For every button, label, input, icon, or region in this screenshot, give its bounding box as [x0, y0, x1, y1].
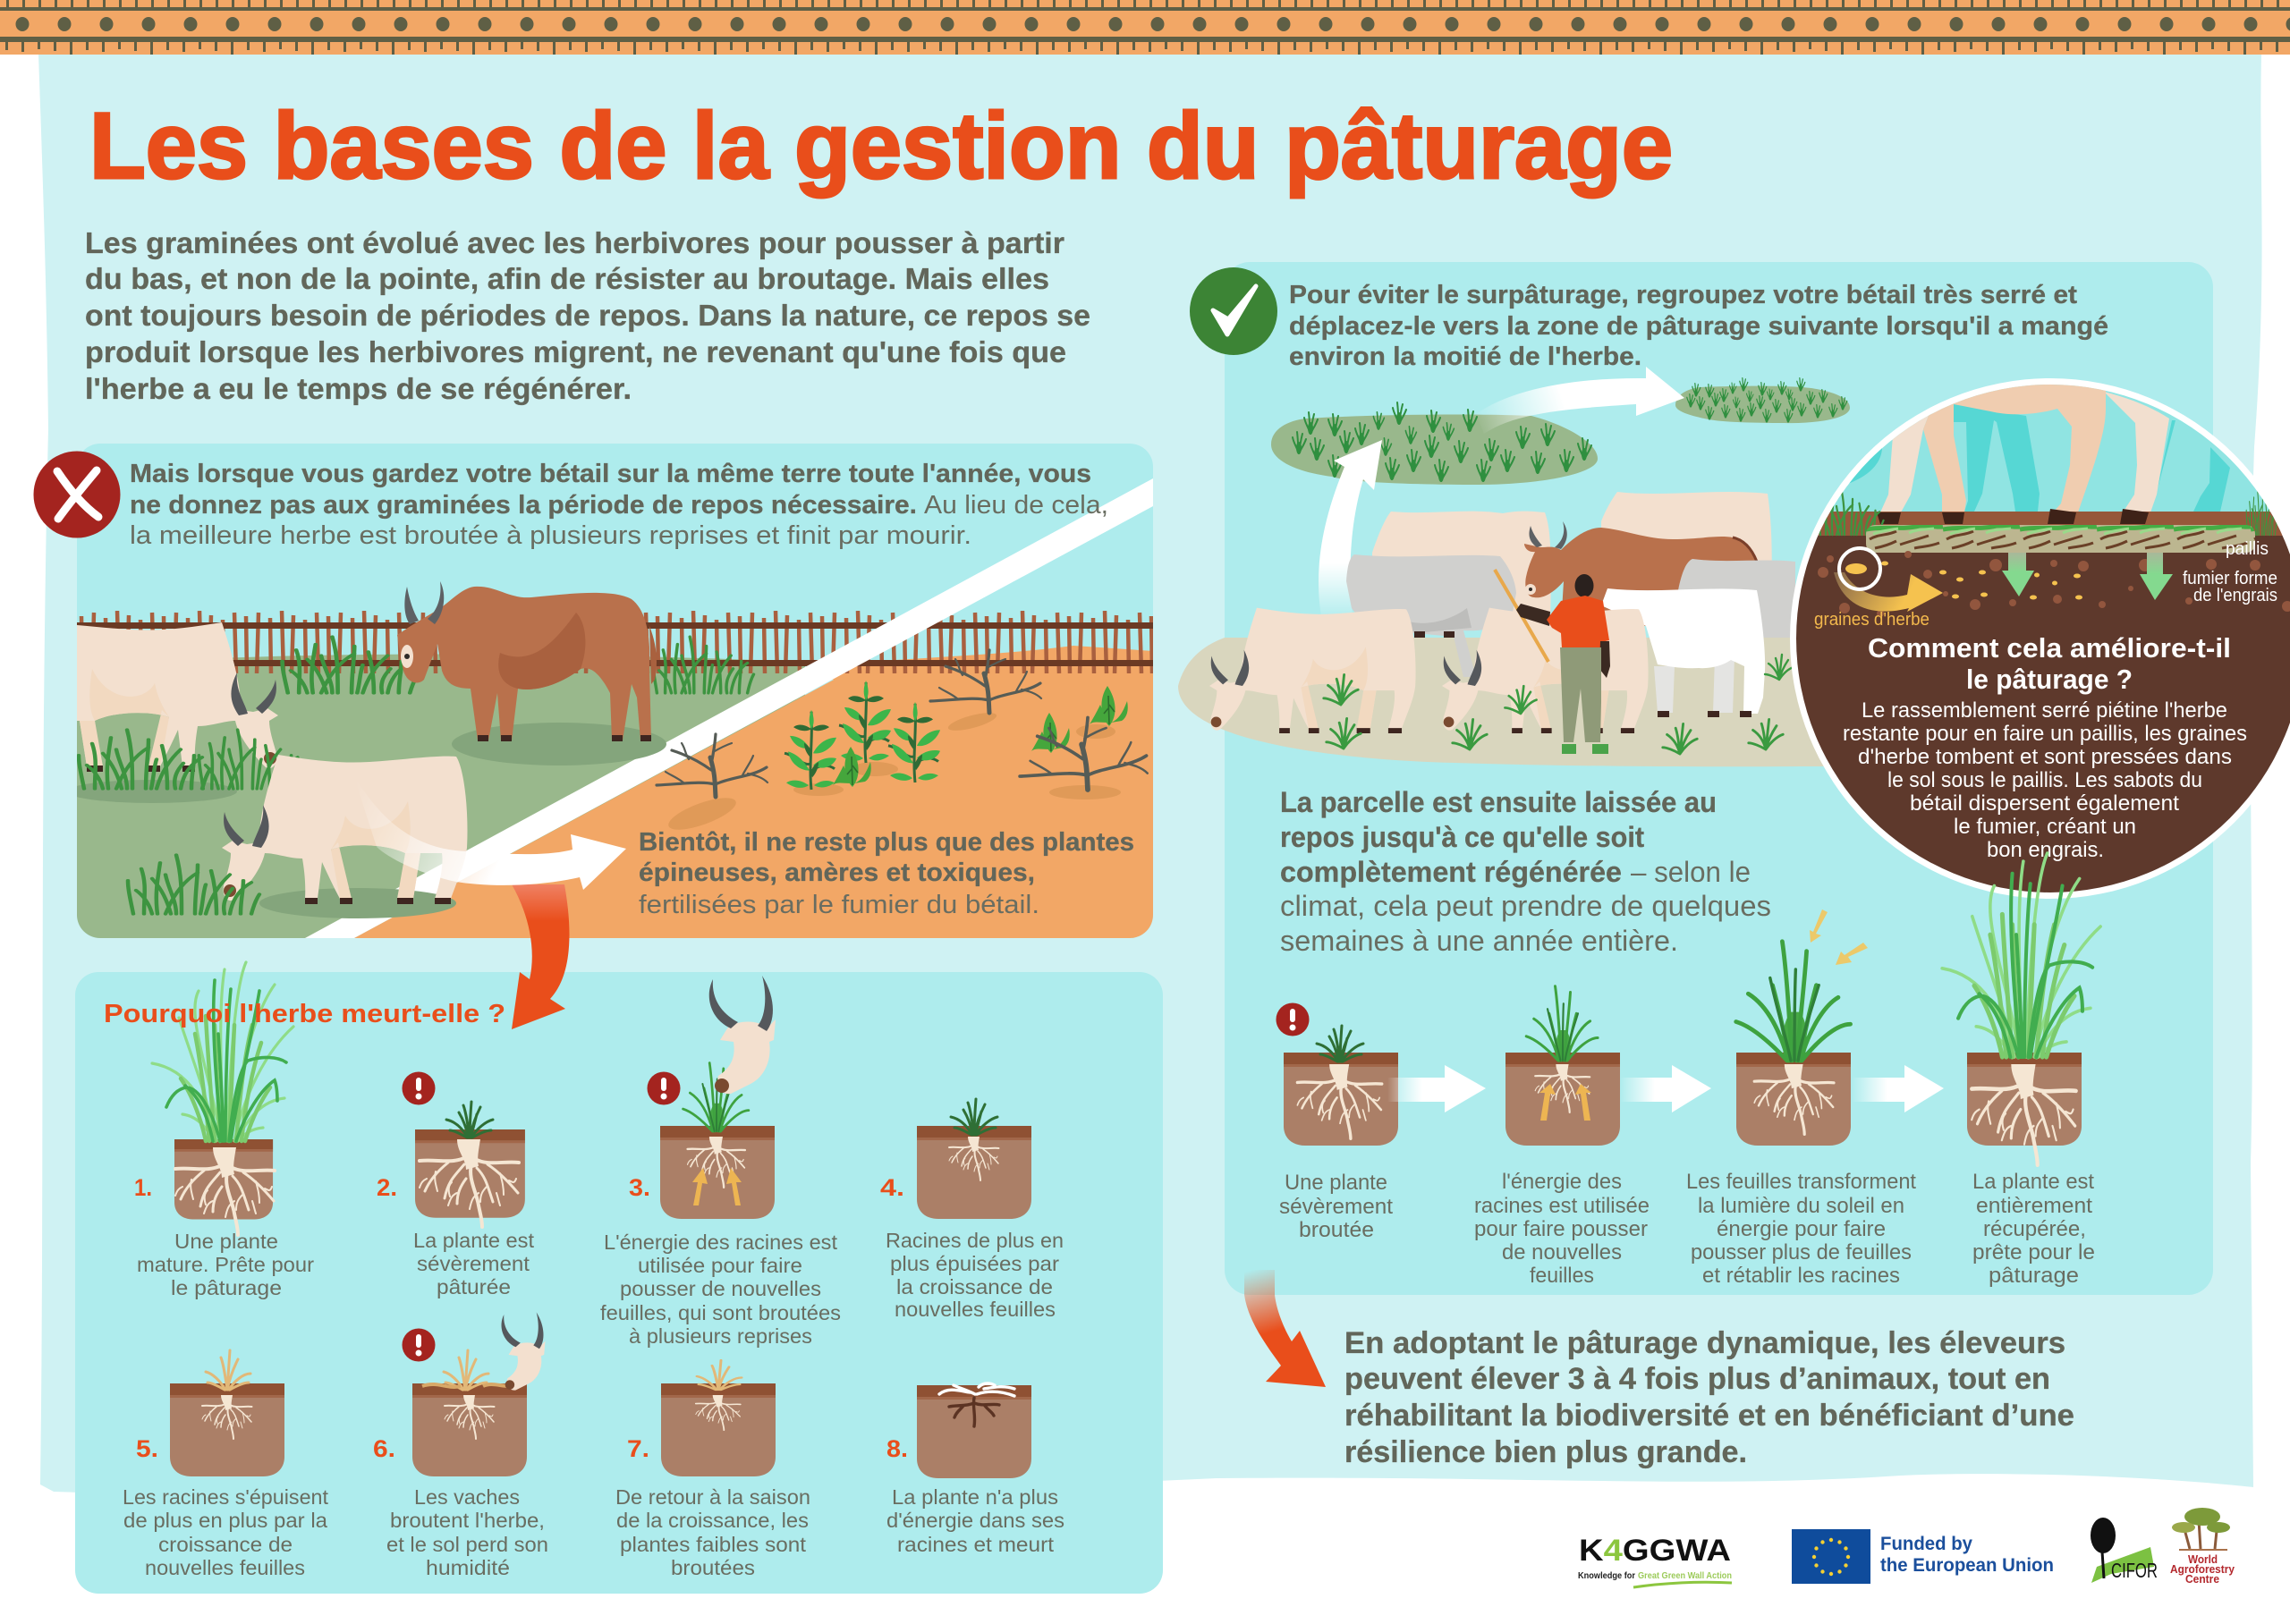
recovery step 3: et rétablir les racines — [1702, 1264, 1900, 1288]
step 6: cows graze, soil dries: broutent l'herbe, — [390, 1509, 545, 1532]
inset illustration: hooves, mulch and soil — [1789, 376, 2290, 911]
step 3: energy used, regrazed: utilisée pour faire — [638, 1254, 802, 1277]
conclusion text — [1344, 1326, 2074, 1469]
recovery step 3: la lumière du soleil en — [1698, 1194, 1904, 1218]
inset body text — [1843, 698, 2247, 862]
logo: CIFOR — [2091, 1518, 2158, 1583]
inset heading: le pâturage ? — [1966, 664, 2133, 695]
arrow: step 3 to 4 — [1852, 1065, 1944, 1112]
step 5: roots more exhausted: croissance de — [158, 1533, 293, 1556]
recovery step 3: énergie pour faire — [1717, 1217, 1886, 1241]
recovery step 1 — [1276, 1003, 1398, 1242]
recovery step 2: de nouvelles — [1502, 1240, 1622, 1265]
step 8: plant dies: 8. — [886, 1435, 908, 1462]
herd on trampled ground — [1178, 492, 1879, 766]
next pasture plots — [1271, 378, 1850, 485]
consequence text: fertilisées par le fumier du bétail. — [639, 891, 1039, 919]
step 5: roots more exhausted: 5. — [136, 1435, 158, 1462]
panel: overgrazing scene — [32, 444, 1153, 938]
step 7: weak plants grazed: broutées — [671, 1556, 755, 1579]
step 6: cows graze, soil dries: Les vaches — [414, 1485, 520, 1509]
step 1: mature plant: mature. Prête pour — [137, 1253, 314, 1276]
recovery step 2: pour faire pousser — [1474, 1217, 1648, 1241]
inset heading: Comment cela améliore-t-il — [1868, 632, 2231, 664]
arrow: move up to next plot — [1319, 440, 1382, 622]
step 7: weak plants grazed: 7. — [627, 1435, 649, 1462]
inset labels: graines d'herbe — [1814, 610, 1930, 630]
inset labels: fumier forme — [2183, 569, 2277, 588]
overgrazing text: ne donnez pas aux graminées la période de repos nécessaire. — [130, 491, 917, 520]
overgrazing text: Mais lorsque vous gardez votre bétail sur la même terre toute l'année, vous — [130, 460, 1091, 488]
herder figure — [1495, 570, 1610, 754]
overgrazing text: la meilleure herbe est broutée à plusieurs reprises et finit par mourir. — [130, 521, 971, 550]
step 5: roots more exhausted: Les racines s'épuisent — [123, 1485, 329, 1509]
inset body text: le sol sous le paillis. Les sabots du — [1887, 768, 2202, 792]
intro text block: l'herbe a eu le temps de se régénérer. — [85, 372, 632, 405]
step 4: roots exhausted: la croissance de — [896, 1275, 1053, 1298]
consequence text: Bientôt, il ne reste plus que des plantes — [639, 828, 1134, 857]
step 7: weak plants grazed: De retour à la saison — [615, 1485, 810, 1509]
inset body text: bon engrais. — [1987, 838, 2104, 862]
conclusion text: résilience bien plus grande. — [1344, 1435, 1747, 1469]
recovery step 4 — [1967, 1053, 2095, 1288]
logo: European Union — [1792, 1529, 2054, 1584]
logo: World Agroforestry Centre: Agroforestry — [2170, 1562, 2235, 1576]
consequence text — [639, 828, 1134, 919]
logo: K4GGWA — [1578, 1534, 1732, 1587]
logo: CIFOR: CIFOR — [2111, 1559, 2158, 1582]
intro text block: Les graminées ont évolué avec les herbivores pour pousser à partir — [85, 226, 1064, 259]
step 3: energy used, regrazed: pousser de nouvelles — [620, 1277, 821, 1300]
icon: red cross — [34, 451, 120, 538]
overgrazing text — [130, 460, 1108, 550]
arrow: orange arrow to conclusion — [1244, 1270, 1326, 1387]
intro text block: ont toujours besoin de périodes de repos. Dans la nature, ce repos se — [85, 299, 1090, 332]
step 3: energy used, regrazed: 3. — [629, 1174, 650, 1201]
step 5: roots more exhausted — [123, 1350, 329, 1579]
recovery step 4: entièrement — [1976, 1194, 2092, 1218]
logo: World Agroforestry Centre: World — [2188, 1552, 2218, 1566]
title: Les bases de la gestion du pâturage — [89, 94, 1673, 199]
instruction text: déplacez-le vers la zone de pâturage suivante lorsqu'il a mangé — [1289, 312, 2108, 341]
step 6: cows graze, soil dries: et le sol perd son — [386, 1533, 548, 1556]
rest period text: – selon le — [1631, 856, 1751, 888]
recovery step 3: Les feuilles transforment — [1686, 1170, 1916, 1194]
recovery step 3: pousser plus de feuilles — [1691, 1240, 1912, 1265]
step 2: severely grazed: La plante est — [413, 1229, 535, 1252]
logo: European Union: Funded by — [1880, 1534, 1972, 1554]
step 6: cows graze, soil dries: 6. — [373, 1435, 395, 1462]
step 2: severely grazed: pâturée — [437, 1275, 511, 1298]
instruction text: environ la moitié de l'herbe. — [1289, 343, 1641, 371]
step 8: plant dies — [886, 1383, 1064, 1556]
recovery step 4: pâturage — [1989, 1264, 2079, 1288]
decorative top border band — [0, 0, 2290, 55]
instruction text — [1289, 281, 2108, 371]
step 8: plant dies: La plante n'a plus — [892, 1485, 1058, 1509]
logo: European Union: the European Union — [1880, 1555, 2054, 1576]
instruction text: Pour éviter le surpâturage, regroupez votre bétail très serré et — [1289, 281, 2077, 309]
recovery step 1: broutée — [1299, 1218, 1374, 1242]
step 4: roots exhausted — [880, 1099, 1064, 1321]
logo: World Agroforestry Centre: Centre — [2185, 1572, 2219, 1586]
step 3: energy used, regrazed: feuilles, qui sont broutées — [600, 1301, 841, 1324]
step 5: roots more exhausted: de plus en plus par la — [123, 1509, 327, 1532]
inset body text: bétail dispersent également — [1910, 791, 2179, 816]
recovery step 2: feuilles — [1530, 1264, 1594, 1288]
step 1: mature plant: Une plante — [174, 1230, 278, 1253]
recovery step 3 — [1686, 909, 1916, 1288]
step 2: severely grazed — [377, 1071, 535, 1298]
step 6: cows graze, soil dries — [373, 1312, 548, 1579]
recovered tall grass over the inset — [1942, 853, 2100, 1057]
intro text block — [85, 226, 1090, 405]
rest period text: La parcelle est ensuite laissée au — [1280, 786, 1717, 818]
step 1: mature plant: 1. — [134, 1174, 152, 1201]
rest period text: climat, cela peut prendre de quelques — [1280, 890, 1771, 922]
step 4: roots exhausted: Racines de plus en — [886, 1229, 1064, 1252]
intro text block: du bas, et non de la pointe, afin de résister au broutage. Mais elles — [85, 262, 1049, 295]
arrow: white curved arrow — [353, 774, 626, 890]
rest period text — [1280, 786, 1771, 957]
recovery step 4: récupérée, — [1983, 1217, 2086, 1241]
step 3: energy used, regrazed: L'énergie des racines est — [604, 1231, 838, 1254]
recovery step 4: prête pour le — [1972, 1240, 2095, 1265]
step 2: severely grazed: 2. — [377, 1174, 397, 1201]
conclusion text: peuvent élever 3 à 4 fois plus d’animaux, tout en — [1344, 1362, 2050, 1396]
logo: K4GGWA: K4GGWA — [1579, 1534, 1731, 1568]
inset circle: how it improves pasture — [1789, 376, 2290, 911]
inset labels: de l'engrais — [2193, 586, 2277, 605]
overgrazing text: Au lieu de cela, — [924, 491, 1108, 520]
step 7: weak plants grazed — [615, 1360, 810, 1579]
arrow: orange curved arrow to why panel — [512, 884, 569, 1029]
step 1: mature plant — [134, 962, 314, 1299]
step 5: roots more exhausted: nouvelles feuilles — [145, 1556, 305, 1579]
step 1: mature plant: le pâturage — [171, 1276, 282, 1299]
inset body text: restante pour en faire un paillis, les graines — [1843, 722, 2247, 746]
consequence text: épineuses, amères et toxiques, — [639, 859, 1035, 887]
scene: pasture, fence and cattle — [32, 478, 1153, 938]
logo: K4GGWA: Great Green Wall Action — [1638, 1571, 1732, 1581]
recovery step 2 — [1474, 986, 1650, 1288]
step 4: roots exhausted: nouvelles feuilles — [895, 1298, 1056, 1321]
step 7: weak plants grazed: plantes faibles sont — [620, 1533, 807, 1556]
step 4: roots exhausted: plus épuisées par — [890, 1252, 1059, 1275]
recovery step 2: l'énergie des — [1502, 1170, 1622, 1194]
rest period text: repos jusqu'à ce qu'elle soit — [1280, 821, 1644, 853]
icon: green check — [1190, 267, 1277, 355]
recovery step 2: racines est utilisée — [1474, 1194, 1650, 1218]
arrow: step 1 to 2 — [1387, 1065, 1486, 1112]
inset body text: le fumier, créant un — [1954, 815, 2136, 839]
lower panel: why the grass dies — [75, 962, 1163, 1594]
arrow: step 2 to 3 — [1620, 1065, 1711, 1112]
conclusion text: En adoptant le pâturage dynamique, les éleveurs — [1344, 1326, 2065, 1360]
intro text block: produit lorsque les herbivores migrent, ne revenant qu'une fois que — [85, 335, 1066, 368]
inset body text: Le rassemblement serré piétine l'herbe — [1862, 698, 2227, 723]
step 4: roots exhausted: 4. — [880, 1174, 904, 1201]
step 8: plant dies: d'énergie dans ses — [886, 1509, 1064, 1532]
step 7: weak plants grazed: de la croissance, les — [616, 1509, 809, 1532]
recovery step 1: Une plante — [1285, 1171, 1387, 1195]
step 6: cows graze, soil dries: humidité — [426, 1556, 510, 1579]
heading: why the grass dies: Pourquoi l'herbe meurt-elle ? — [104, 1000, 505, 1028]
recovery step 4: La plante est — [1972, 1170, 2094, 1194]
arrow: move to following plot — [1476, 367, 1684, 434]
logo: World Agroforestry Centre — [2170, 1508, 2235, 1586]
step 8: plant dies: racines et meurt — [897, 1533, 1055, 1556]
step 3: energy used, regrazed — [600, 976, 841, 1348]
rest period text: complètement régénérée — [1280, 856, 1622, 888]
inset body text: d'herbe tombent et sont pressées dans — [1858, 745, 2232, 769]
rest period text: semaines à une année entière. — [1280, 925, 1678, 957]
logo: K4GGWA: Knowledge for — [1578, 1571, 1635, 1581]
conclusion text: réhabilitant la biodiversité et en bénéficiant d’une — [1344, 1399, 2074, 1433]
panel: managed grazing — [1178, 262, 2213, 1295]
inset labels — [1814, 539, 2277, 630]
recovery step 1: sévèrement — [1279, 1195, 1393, 1219]
step 2: severely grazed: sévèrement — [417, 1252, 530, 1275]
step 3: energy used, regrazed: à plusieurs reprises — [629, 1324, 812, 1348]
inset labels: paillis — [2226, 539, 2269, 559]
inset heading — [1868, 632, 2231, 695]
